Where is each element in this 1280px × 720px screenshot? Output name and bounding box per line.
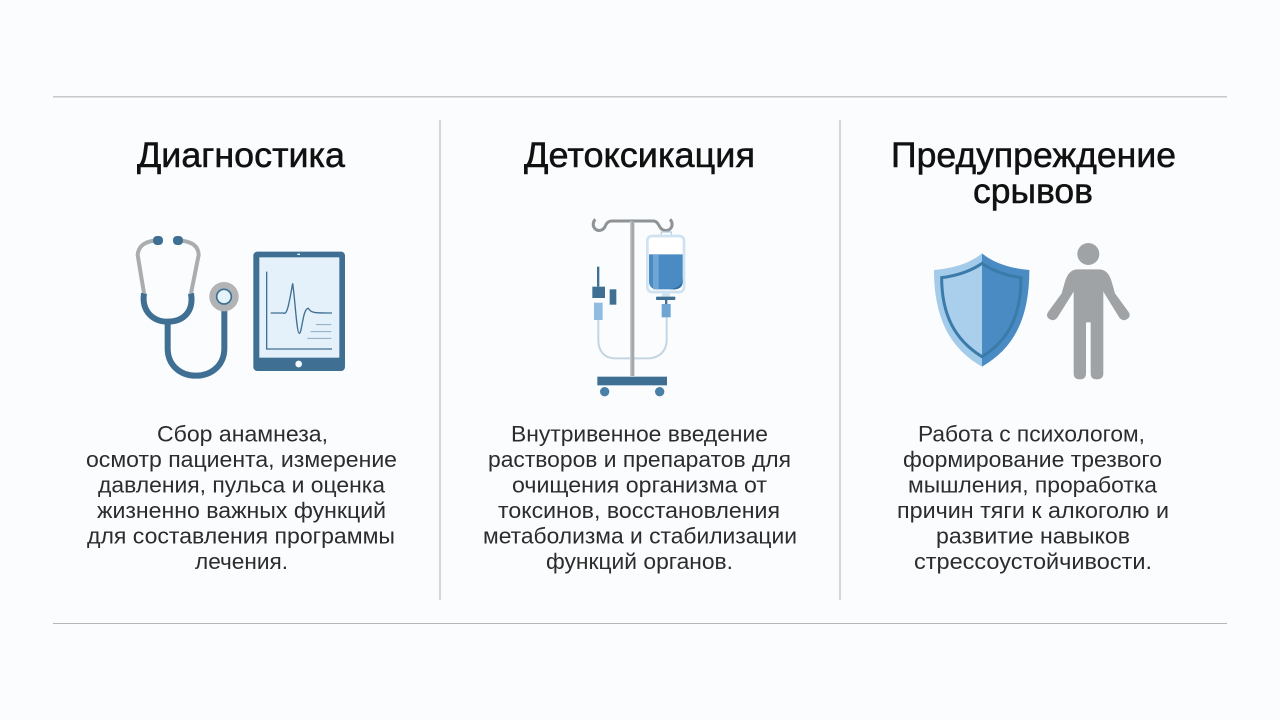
description: мышления, проработка bbox=[908, 472, 1158, 498]
icon: shield bbox=[934, 253, 1029, 367]
heading: Детоксикация: Детоксикация bbox=[524, 136, 755, 175]
icon: stethoscope bbox=[138, 236, 239, 376]
panel: Предупреждение срывов bbox=[891, 136, 1176, 574]
description: Работа с психологом, bbox=[918, 422, 1145, 446]
heading: Предупреждение срывов bbox=[891, 136, 1176, 211]
description: давления, пульса и оценка bbox=[98, 472, 386, 498]
heading: Предупреждение срывов: Предупреждение bbox=[891, 136, 1176, 175]
description bbox=[86, 422, 397, 574]
description bbox=[897, 422, 1169, 574]
icon: tablet with ECG bbox=[253, 252, 345, 371]
description: развитие навыков bbox=[936, 524, 1130, 548]
description: стрессоустойчивости. bbox=[914, 549, 1152, 574]
description: жизненно важных функций bbox=[97, 498, 386, 523]
panel: Диагностика bbox=[86, 136, 397, 574]
description: лечения. bbox=[195, 549, 288, 574]
description: очищения организма от bbox=[512, 472, 767, 498]
description: токсинов, восстановления bbox=[498, 498, 780, 523]
heading: Предупреждение срывов: срывов bbox=[973, 172, 1093, 211]
description: Сбор анамнеза, bbox=[157, 422, 328, 446]
description: растворов и препаратов для bbox=[488, 447, 791, 472]
icon: IV drip stand bbox=[592, 219, 684, 396]
description: для составления программы bbox=[87, 524, 395, 548]
description: причин тяги к алкоголю и bbox=[897, 498, 1169, 523]
description: формирование трезвого bbox=[903, 447, 1162, 472]
heading: Диагностика: Диагностика bbox=[137, 136, 346, 175]
panel: Детоксикация bbox=[483, 136, 797, 574]
description bbox=[483, 422, 797, 574]
description: метаболизма и стабилизации bbox=[483, 524, 797, 548]
description: осмотр пациента, измерение bbox=[86, 447, 397, 472]
icon: person bbox=[1047, 243, 1130, 379]
description: Внутривенное введение bbox=[511, 422, 768, 446]
description: функций органов. bbox=[546, 549, 733, 574]
